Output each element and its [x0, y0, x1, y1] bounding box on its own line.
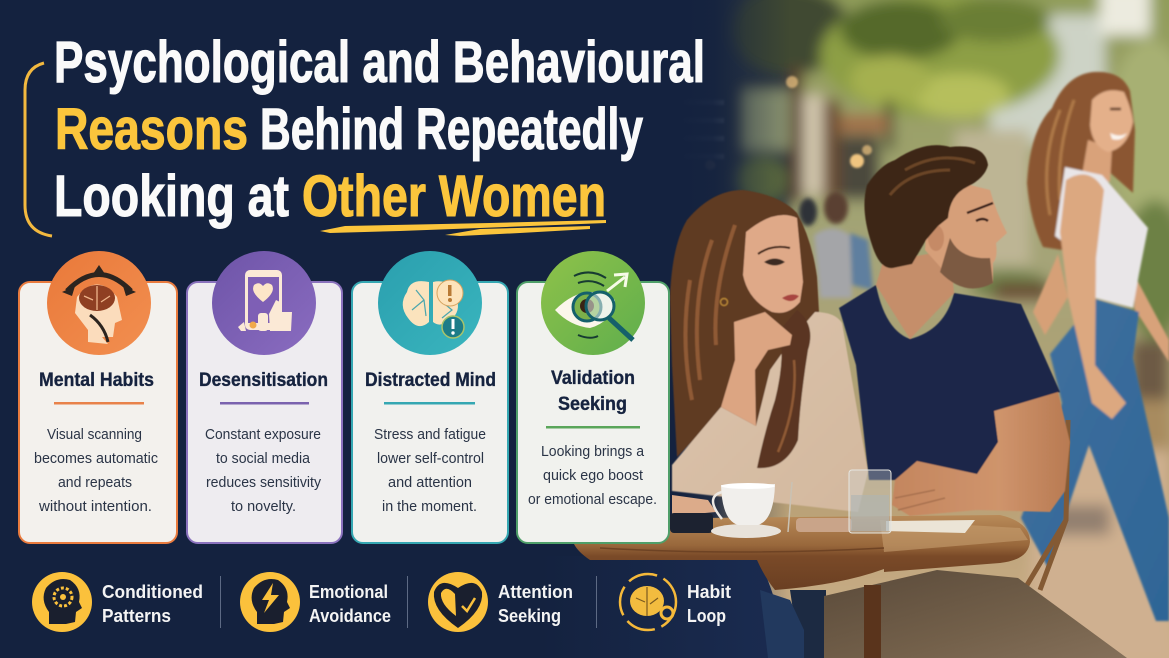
card: Distracted Mind	[352, 251, 508, 543]
card: Validation Seeking	[517, 251, 669, 543]
glass	[849, 470, 891, 533]
eyes	[764, 258, 785, 266]
label: attention seeking: Attention	[498, 582, 573, 602]
tank top	[1055, 167, 1148, 308]
icon: phone and thumbs up	[212, 251, 316, 355]
label: emotional avoidance	[309, 582, 391, 626]
lips	[782, 294, 799, 301]
icon: brain with alerts	[378, 251, 482, 355]
body text: to novelty.	[231, 498, 296, 515]
man	[839, 145, 1070, 516]
body text	[34, 426, 158, 515]
heading	[551, 368, 635, 415]
body text: reduces sensitivity	[206, 474, 321, 491]
label: emotional avoidance: Avoidance	[309, 606, 391, 626]
body text: Visual scanning	[47, 426, 142, 443]
saucer	[711, 524, 781, 538]
label: habit loop	[687, 582, 731, 626]
label: attention seeking: Seeking	[498, 606, 561, 626]
label: attention seeking	[498, 582, 573, 626]
front hair lock	[757, 310, 810, 468]
body text: quick ego boost	[543, 467, 644, 484]
icon: eye and magnifier	[541, 251, 645, 355]
body text: Constant exposure	[205, 426, 321, 443]
body text: Stress and fatigue	[374, 426, 486, 443]
label: conditioned patterns: Patterns	[102, 606, 171, 626]
card background	[352, 282, 508, 543]
body text	[528, 443, 657, 508]
body text: in the moment.	[382, 498, 477, 515]
body text	[205, 426, 321, 515]
icon: brain in head	[47, 251, 151, 355]
far arm	[1033, 254, 1068, 335]
label: emotional avoidance: Emotional	[309, 582, 388, 602]
icon: emotional avoidance	[240, 572, 300, 632]
body text: to social media	[216, 450, 311, 467]
icon: conditioned patterns	[32, 572, 92, 632]
heading: Validation	[551, 368, 635, 389]
background people	[799, 192, 873, 298]
heading: Distracted Mind	[365, 370, 496, 391]
brush underline	[320, 220, 606, 236]
label: conditioned patterns	[102, 582, 203, 626]
trousers and jeans	[760, 570, 1127, 658]
back hair	[670, 190, 819, 468]
cup	[721, 484, 775, 525]
body text: or emotional escape.	[528, 491, 657, 508]
hair	[1027, 72, 1135, 250]
body text	[374, 426, 486, 515]
card: Mental Habits	[19, 251, 177, 543]
divider	[546, 426, 640, 428]
title bracket	[25, 63, 52, 236]
walking woman	[1021, 72, 1169, 621]
card background	[187, 282, 342, 543]
body text: becomes automatic	[34, 450, 158, 467]
label: habit loop: Habit	[687, 582, 731, 602]
body text: without intention.	[38, 498, 152, 515]
title: Psychological and Behavioural	[54, 30, 705, 95]
woman's hand	[672, 495, 716, 516]
card background	[19, 282, 177, 543]
heading: Seeking	[558, 394, 627, 415]
icon: attention seeking	[428, 572, 488, 632]
label: habit loop: Loop	[687, 606, 726, 626]
bottom navy strip	[0, 556, 790, 658]
title: Other Women	[302, 164, 606, 229]
navy left panel	[0, 0, 790, 658]
heading: Desensitisation	[199, 370, 328, 391]
tall glass	[788, 482, 792, 532]
paper	[886, 520, 975, 533]
sweater	[672, 312, 868, 512]
chair	[1024, 420, 1068, 590]
bokeh lights	[680, 76, 872, 170]
ear	[928, 225, 944, 251]
beard	[940, 238, 993, 288]
shirt	[839, 285, 1060, 480]
face	[1090, 90, 1133, 152]
body text: Looking brings a	[541, 443, 645, 460]
eye	[967, 203, 993, 221]
arm	[1060, 174, 1126, 419]
hair	[864, 145, 988, 268]
cafe table	[574, 470, 1030, 658]
card: Desensitisation	[187, 251, 342, 543]
body text: and repeats	[58, 474, 132, 491]
body text: lower self-control	[377, 450, 484, 467]
seated woman	[670, 190, 868, 512]
divider	[220, 402, 309, 404]
fingers	[895, 490, 945, 510]
face	[925, 175, 1007, 287]
title: Looking at	[54, 164, 289, 229]
body text: and attention	[388, 474, 472, 491]
divider	[54, 402, 144, 404]
icon: habit loop	[620, 574, 676, 630]
forearm and hand	[721, 312, 792, 426]
phone	[670, 513, 713, 533]
title	[54, 30, 705, 229]
title: Behind Repeatedly	[260, 97, 643, 162]
photo background: blurred park	[620, 0, 1169, 658]
face	[743, 215, 803, 313]
beige phone	[796, 518, 852, 532]
label: conditioned patterns: Conditioned	[102, 582, 203, 602]
card background	[517, 282, 669, 543]
divider	[384, 402, 475, 404]
neck	[1082, 140, 1112, 182]
title: Reasons	[55, 97, 248, 162]
neck	[876, 250, 954, 339]
jeans	[1021, 299, 1169, 621]
earring	[720, 298, 728, 306]
heading: Mental Habits	[39, 370, 154, 391]
arm	[892, 392, 1070, 516]
